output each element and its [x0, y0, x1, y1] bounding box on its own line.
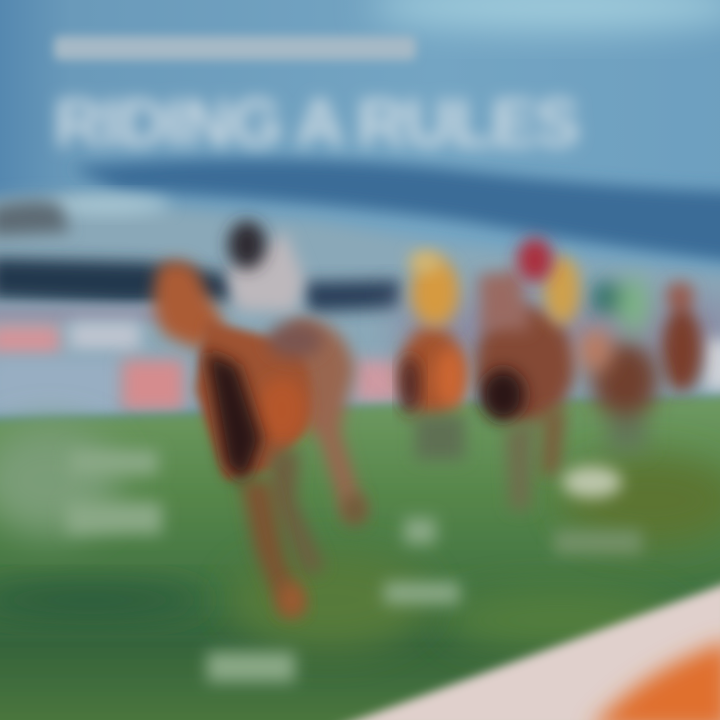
- horse: green jockey: [591, 277, 659, 450]
- horse: orange silks jockey: [400, 251, 465, 460]
- horse: red cap and yellow silks jockey: [475, 238, 611, 510]
- label: centre small: [404, 518, 436, 544]
- dark storm cloud band: [70, 159, 720, 262]
- label: left column top: [70, 450, 158, 474]
- label: centre wide: [384, 582, 460, 604]
- jockey helmet: [228, 221, 266, 269]
- front legs: [268, 450, 325, 575]
- dark shadow on chest: [205, 350, 262, 485]
- grandstand: [0, 195, 720, 420]
- label: left column bottom: [66, 502, 162, 534]
- horse: background far right: [662, 282, 702, 392]
- sky background: [0, 0, 720, 340]
- head and neck: [154, 261, 225, 350]
- title: [54, 36, 580, 161]
- subtitle line: [54, 36, 416, 60]
- corner banner: [330, 582, 720, 720]
- label: bottom: [207, 652, 295, 682]
- body: [195, 320, 311, 480]
- turf: [0, 396, 720, 720]
- turf labels: [66, 450, 642, 682]
- saddle area: [267, 322, 323, 358]
- main heading: RIDING A RULES: [54, 85, 580, 161]
- label: right: [554, 530, 642, 554]
- label: highlight pill: [562, 466, 622, 498]
- horse: lead chestnut horse with jockey: [154, 221, 367, 618]
- jockey body: [225, 232, 305, 312]
- hind quarters and back legs: [290, 320, 365, 520]
